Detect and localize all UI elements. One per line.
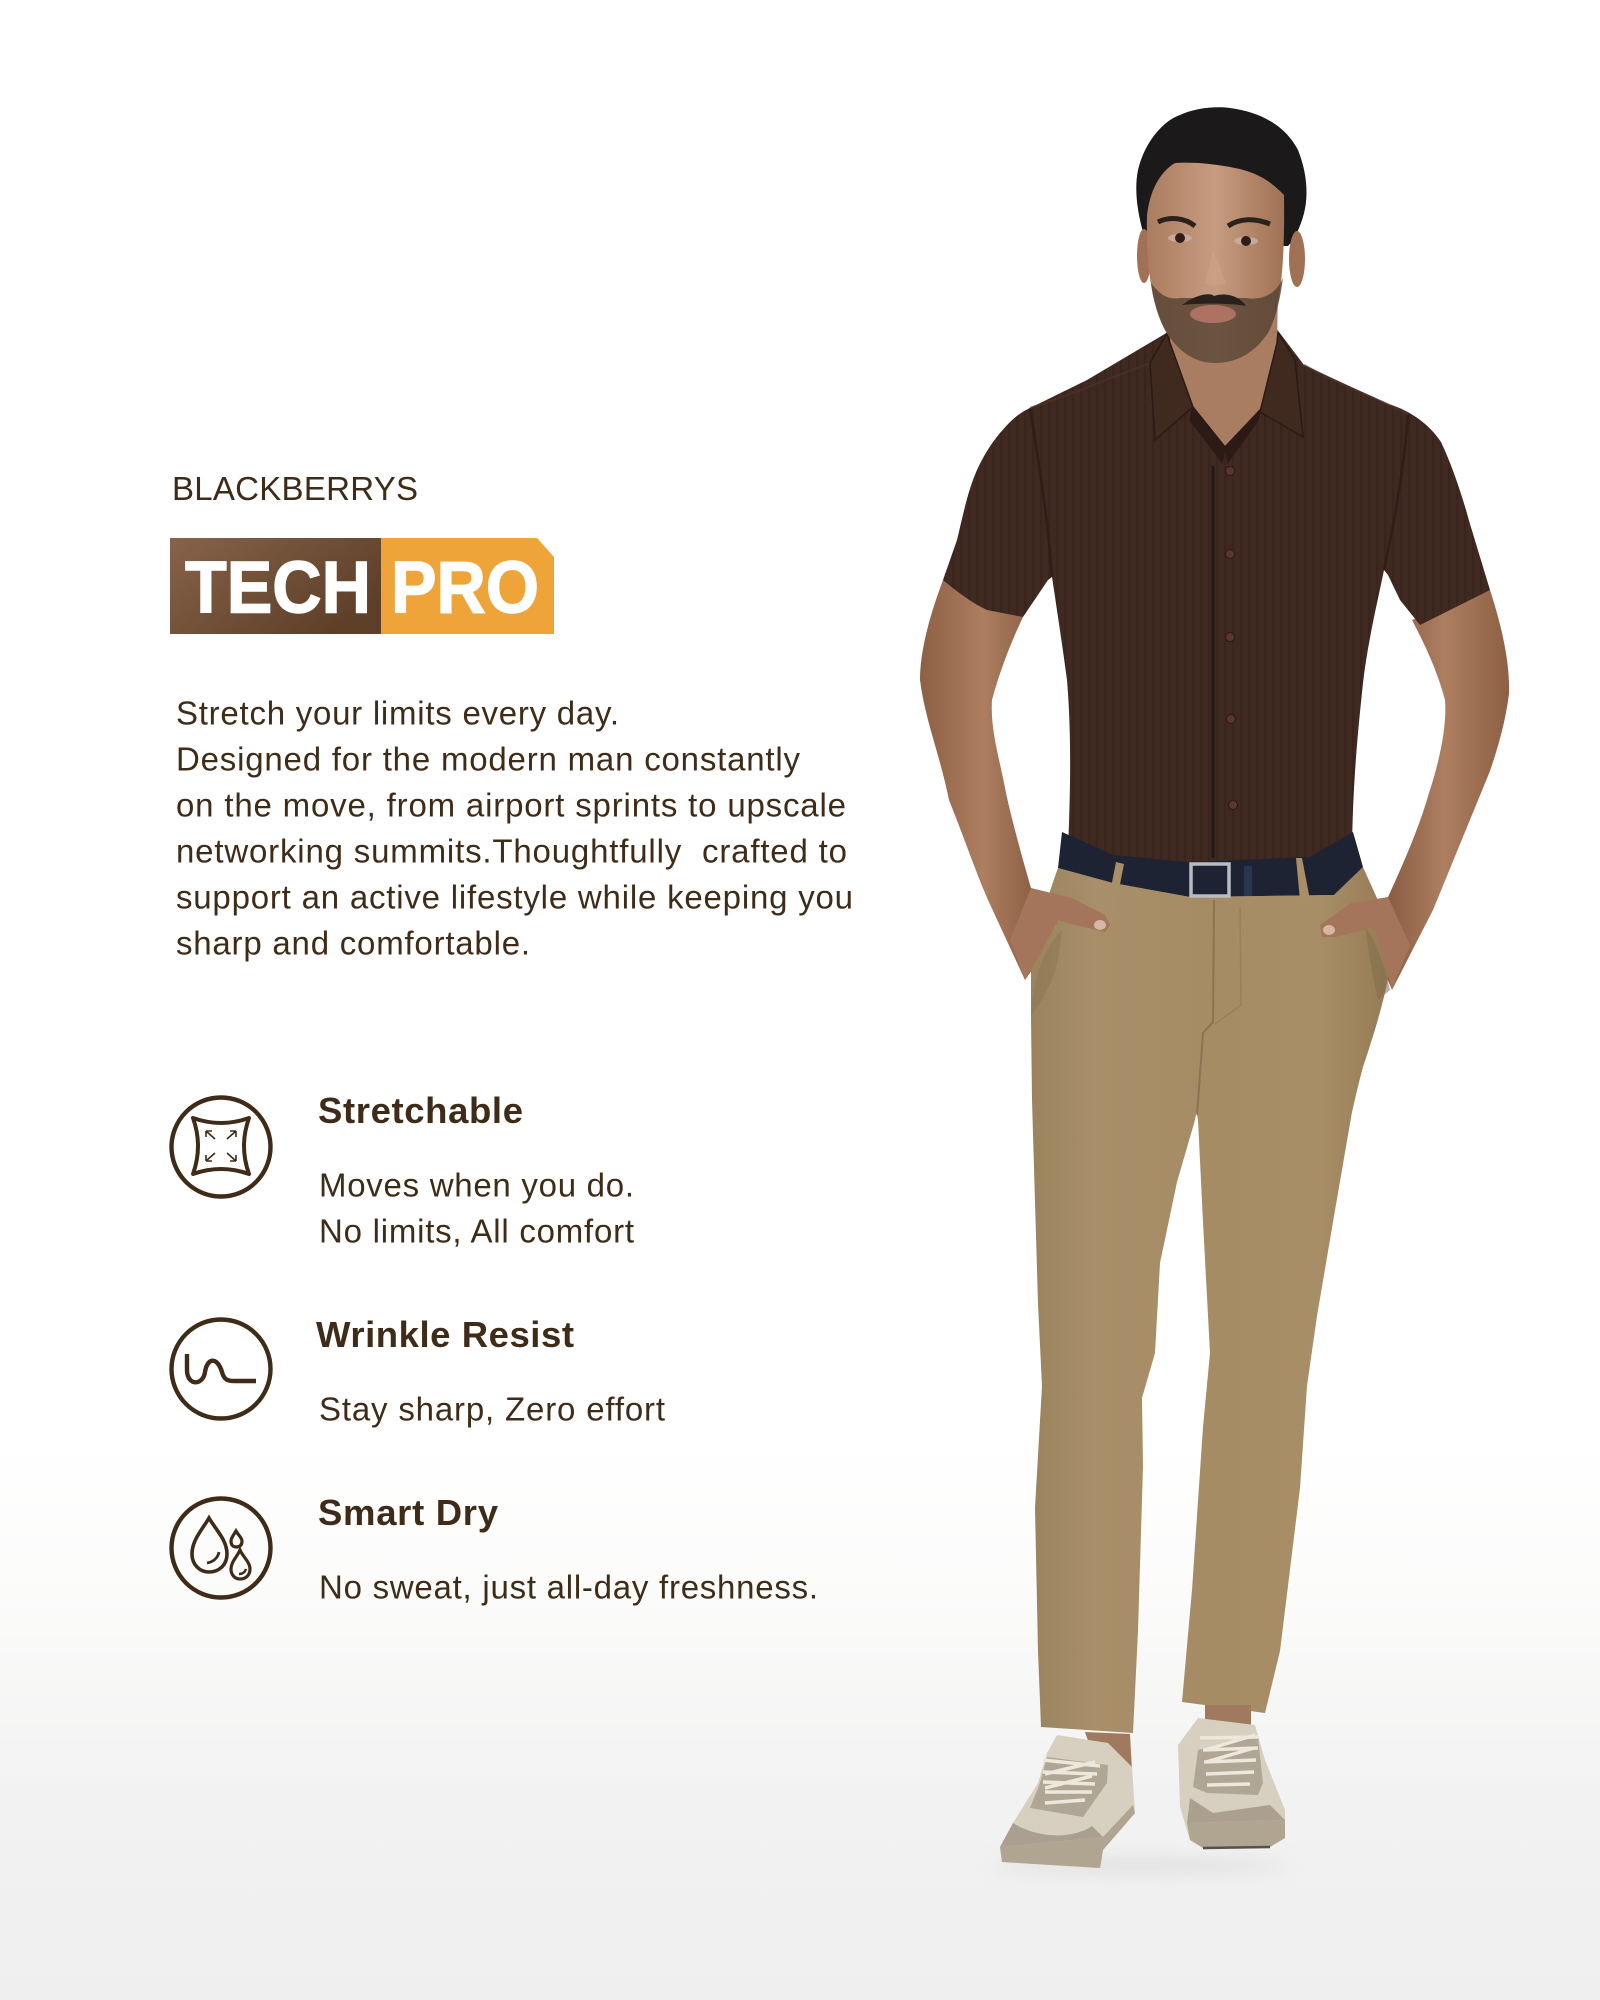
feature: stretchable text — [318, 1090, 634, 1250]
right shoe — [1178, 1718, 1285, 1848]
right arm — [1365, 590, 1509, 990]
trousers — [1031, 867, 1390, 1733]
icon: wrinkle resist — [172, 1320, 270, 1418]
intro paragraph: sharp and comfortable. — [176, 924, 530, 962]
left hand — [1010, 888, 1110, 980]
photo: model — [920, 107, 1509, 1874]
feature: smart dry text: No sweat, just all-day freshness. — [319, 1568, 818, 1606]
intro paragraph: on the move, from airport sprints to upscale — [176, 786, 846, 824]
left shoe — [1000, 1735, 1135, 1868]
right ankle — [1205, 1705, 1251, 1735]
feature: stretchable text: Stretchable — [318, 1090, 523, 1131]
feature: stretchable text: No limits, All comfort — [319, 1212, 634, 1250]
floor shadow — [990, 1858, 1290, 1874]
icon: smart dry — [172, 1498, 270, 1598]
collar — [1150, 332, 1303, 462]
left arm — [920, 580, 1060, 980]
shirt buttons — [1226, 466, 1238, 810]
feature: stretchable text: Moves when you do. — [319, 1166, 634, 1204]
feature: wrinkle resist text: Wrinkle Resist — [316, 1314, 574, 1355]
intro paragraph: Designed for the modern man constantly — [176, 740, 800, 778]
feature: wrinkle resist text — [316, 1314, 665, 1428]
logo: Tech Pro badge — [170, 538, 554, 634]
right hand — [1320, 897, 1410, 990]
feature: smart dry text — [318, 1492, 818, 1606]
brand name: BLACKBERRYS — [172, 470, 418, 507]
left ankle — [1085, 1732, 1132, 1775]
moustache — [1182, 294, 1246, 306]
lips — [1190, 305, 1236, 323]
hair — [1136, 107, 1307, 246]
belt — [1058, 832, 1363, 920]
intro paragraph — [176, 694, 853, 962]
beard — [1151, 278, 1283, 363]
logo: Tech Pro badge: TECH — [185, 548, 371, 628]
head — [1136, 107, 1307, 363]
feature: smart dry text: Smart Dry — [318, 1492, 499, 1533]
feature: wrinkle resist text: Stay sharp, Zero effort — [319, 1390, 665, 1428]
intro paragraph: support an active lifestyle while keeping you — [176, 878, 853, 916]
icon: stretchable — [172, 1098, 270, 1196]
intro paragraph: Stretch your limits every day. — [176, 694, 619, 732]
logo: Tech Pro badge: PRO — [391, 548, 539, 628]
shirt — [943, 332, 1490, 880]
neck — [1170, 290, 1278, 447]
intro paragraph: networking summits.Thoughtfully crafted to — [176, 832, 847, 870]
